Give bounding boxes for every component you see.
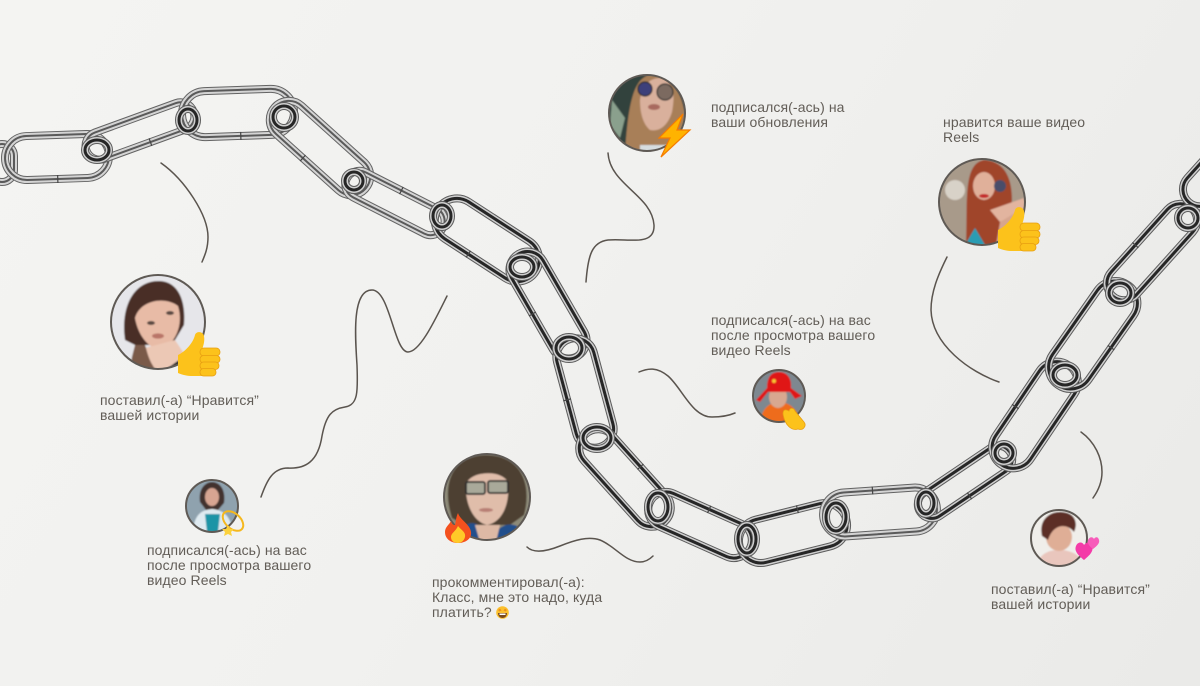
text: story like 2 bbox=[991, 581, 1150, 612]
text: comment: прокомментировал(-а): bbox=[432, 574, 585, 590]
icon: clapping hand bbox=[783, 408, 805, 429]
avatar 6: man in red hat bbox=[753, 370, 805, 422]
connector line 7 bbox=[1081, 432, 1102, 498]
avatar 5: person with curly hair bbox=[444, 454, 530, 542]
metal chain bbox=[0, 88, 1200, 568]
text: subscribed to updates bbox=[711, 99, 845, 130]
avatar 2: woman in blue bbox=[186, 480, 238, 532]
text: story like 1: поставил(-а) “Нравится” bbox=[100, 392, 259, 408]
avatar 7: woman with short hair bbox=[1030, 509, 1088, 567]
icon: thumbs up 1 bbox=[178, 332, 220, 376]
text: subscribed to updates: ваши обновления bbox=[711, 114, 828, 130]
text: subscribed after Reels 2: видео Reels bbox=[711, 342, 791, 358]
icon: halo star bbox=[219, 507, 247, 536]
icon: thumbs up 2 bbox=[998, 207, 1040, 251]
text: likes your Reels video: Reels bbox=[943, 129, 979, 145]
text: story like 1 bbox=[100, 392, 259, 423]
connector line 5 bbox=[527, 538, 653, 562]
icon: fire bbox=[445, 513, 471, 543]
connector line 4 bbox=[639, 369, 735, 417]
text: likes your Reels video bbox=[943, 114, 1085, 145]
main illustration bbox=[0, 74, 1200, 567]
avatar 3: woman with glasses bbox=[609, 75, 686, 152]
text: likes your Reels video: нравится ваше видео bbox=[943, 114, 1085, 130]
text: subscribed after Reels 1 bbox=[147, 542, 311, 588]
text: comment: Класс, мне это надо, куда bbox=[432, 589, 602, 605]
text: story like 2: вашей истории bbox=[991, 596, 1090, 612]
text: subscribed after Reels 2: подписался(-ась) на вас bbox=[711, 312, 871, 328]
text: subscribed after Reels 2: после просмотра вашего bbox=[711, 327, 875, 343]
text: story like 1: вашей истории bbox=[100, 407, 199, 423]
text: subscribed after Reels 1: подписался(-ась) на вас bbox=[147, 542, 307, 558]
text: subscribed to updates: подписался(-ась) на bbox=[711, 99, 845, 115]
icon: lightning bbox=[659, 114, 690, 157]
avatar 1: young woman bbox=[110, 274, 210, 372]
icon: hearts bbox=[1075, 537, 1099, 560]
connector line 1 bbox=[161, 163, 208, 262]
text: subscribed after Reels 1: после просмотра вашего bbox=[147, 557, 311, 573]
connector line 2 bbox=[261, 290, 447, 497]
text: subscribed after Reels 1: видео Reels bbox=[147, 572, 227, 588]
avatar 4: red-haired woman bbox=[939, 159, 1025, 245]
text: subscribed after Reels 2 bbox=[711, 312, 875, 358]
text: comment: платить? bbox=[432, 604, 492, 620]
text: comment bbox=[432, 574, 602, 620]
text: story like 2: поставил(-а) “Нравится” bbox=[991, 581, 1150, 597]
connector line 3 bbox=[586, 153, 654, 282]
connector line 6 bbox=[931, 257, 999, 382]
